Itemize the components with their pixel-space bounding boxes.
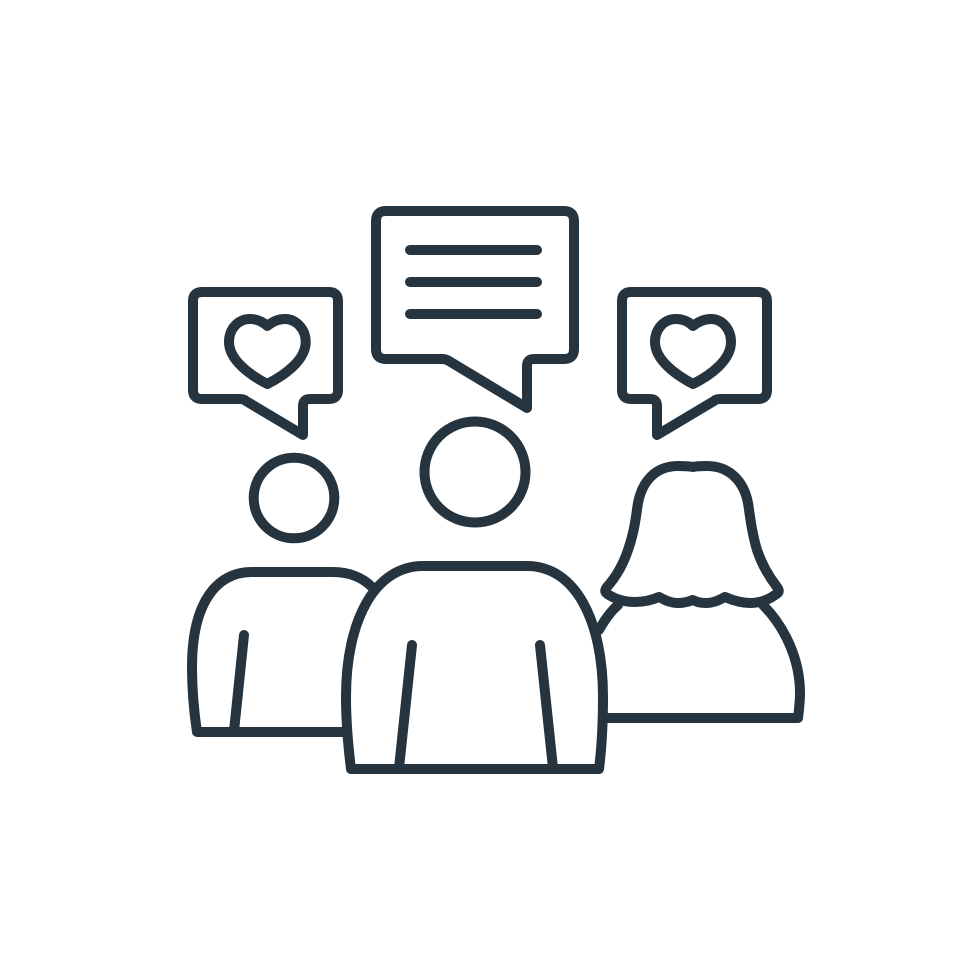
person: right with long hair <box>599 466 800 718</box>
person: center front <box>346 422 603 769</box>
speech bubble: left with heart <box>193 292 338 435</box>
speech bubble: center with text lines <box>376 211 574 408</box>
person: left <box>192 458 372 732</box>
speech bubble: right with heart <box>622 292 767 435</box>
